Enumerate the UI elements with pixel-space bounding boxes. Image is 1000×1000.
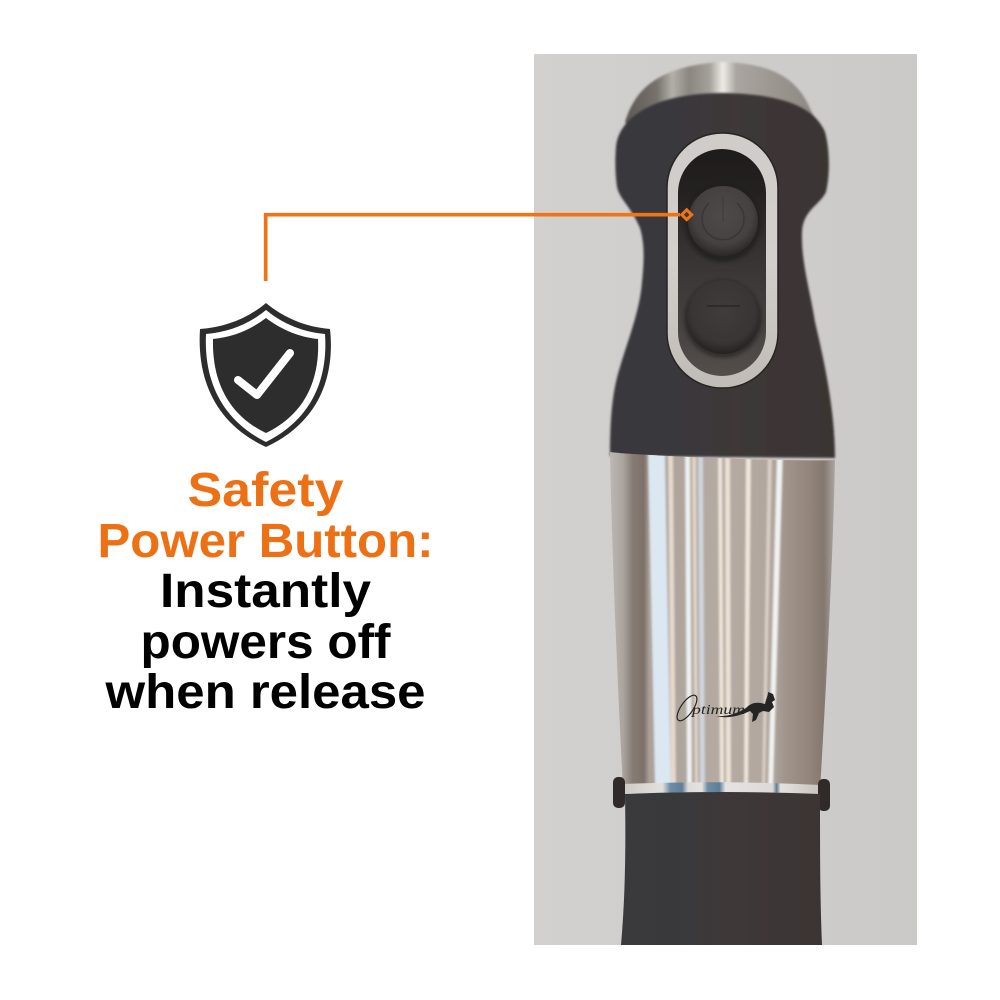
product photo panel: hand blender	[534, 54, 917, 945]
power button	[685, 186, 761, 262]
button recess	[678, 149, 766, 376]
brand logo: ptimum	[691, 703, 745, 718]
right screw	[818, 779, 830, 811]
blender steel top cap	[625, 62, 817, 135]
blender black handle	[610, 93, 835, 458]
blender lower black shaft	[621, 792, 822, 945]
chrome ring	[623, 782, 821, 794]
photo backdrop	[534, 54, 917, 945]
brand logo	[673, 692, 775, 724]
button bezel	[667, 133, 778, 388]
heading: orange title: Safety	[188, 464, 344, 517]
body text	[104, 565, 426, 719]
callout diamond marker	[682, 210, 692, 220]
blender steel sleeve	[605, 448, 840, 793]
callout connector line	[266, 210, 692, 281]
heading: orange title: Power Button:	[98, 515, 434, 568]
icon: shield with check mark	[200, 303, 331, 447]
body text: Instantly	[160, 565, 371, 618]
sleeve reflections	[648, 450, 783, 790]
text block: safety power button description	[98, 464, 434, 719]
body text: powers off	[140, 616, 392, 669]
speed button	[684, 280, 762, 358]
heading: orange title	[98, 464, 434, 568]
body text: when release	[104, 666, 426, 719]
left screw	[613, 777, 625, 808]
